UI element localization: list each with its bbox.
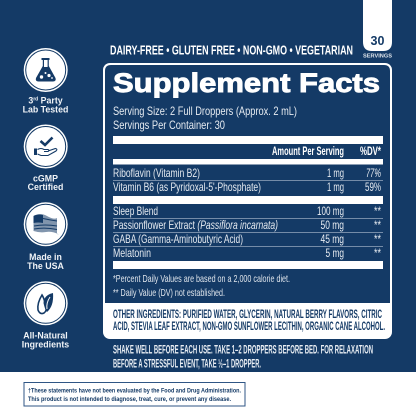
table: Riboflavin (Vitamin B2) (113, 166, 200, 180)
footnotes: *Percent Daily Values are based on a 2,000 calorie diet. (113, 273, 290, 285)
label: cGMP: cGMP (33, 173, 58, 183)
other ingredients (113, 307, 385, 333)
table: Passionflower Extract (Passiflora incarnata) (113, 218, 278, 232)
table: ** (374, 204, 381, 218)
panel: supplement facts (103, 63, 392, 339)
table: ** (374, 232, 381, 246)
label: all-natural: All-Natural (23, 330, 68, 340)
label: made in the USA (27, 252, 64, 271)
directions: BEFORE A STRESSFUL EVENT, TAKE ½–1 DROPPER. (113, 356, 261, 370)
label: lab tested: Lab Tested (23, 104, 68, 114)
table: Melatonin (113, 246, 151, 260)
table: Amount Per Serving (272, 146, 344, 158)
table: 5 mg (326, 246, 344, 260)
label: lab tested: rd (33, 96, 38, 102)
serving info: Serving Size: 2 Full Droppers (Approx. 2 mL) (113, 104, 297, 118)
servings tab: 30 (371, 34, 384, 48)
table: 77% (366, 166, 381, 180)
label: made in the USA: Made in (29, 252, 62, 262)
servings tab: SERVINGS (363, 54, 393, 60)
label: lab tested (23, 96, 68, 114)
label: lab tested: Party (38, 96, 63, 106)
label: cGMP: Certified (28, 182, 63, 192)
icon: natural leaf seed (24, 281, 68, 325)
footnotes: ** Daily Value (DV) not established. (113, 287, 225, 299)
table (113, 136, 383, 269)
table: ** (374, 246, 381, 260)
serving info: Servings Per Container: 30 (113, 118, 225, 132)
directions (113, 342, 373, 370)
table: 45 mg (320, 232, 344, 246)
table: 1 mg (327, 180, 344, 194)
serving info (113, 104, 297, 132)
disclaimer box: †These statements have not been evaluated by the Food and Drug Administration. (28, 388, 241, 394)
disclaimer box: This product is not intended to diagnose, treat, cure, or prevent any disease. (28, 396, 231, 403)
table: Vitamin B6 (as Pyridoxal-5'-Phosphate) (113, 180, 261, 194)
table: ** (374, 218, 381, 232)
icon: USA flag (24, 202, 68, 246)
icon: cGMP hand and check (24, 124, 68, 168)
label: cGMP (28, 173, 63, 192)
footnotes (113, 273, 290, 299)
label: made in the USA: The USA (27, 261, 64, 271)
label: lab tested: 3 (28, 96, 33, 106)
table: 1 mg (327, 166, 344, 180)
table: 100 mg (317, 204, 344, 218)
table: GABA (Gamma-Aminobutyric Acid) (113, 232, 243, 246)
heading: Supplement Facts (113, 68, 380, 98)
icon: lab tested flask (24, 48, 68, 92)
table: %DV* (360, 146, 381, 158)
table: Sleep Blend (113, 204, 158, 218)
label: all-natural: Ingredients (22, 339, 69, 349)
table: 50 mg (320, 218, 344, 232)
table: 59% (365, 180, 381, 194)
servings tab (363, 0, 393, 60)
disclaimer box (24, 382, 245, 406)
label: all-natural (22, 330, 69, 349)
